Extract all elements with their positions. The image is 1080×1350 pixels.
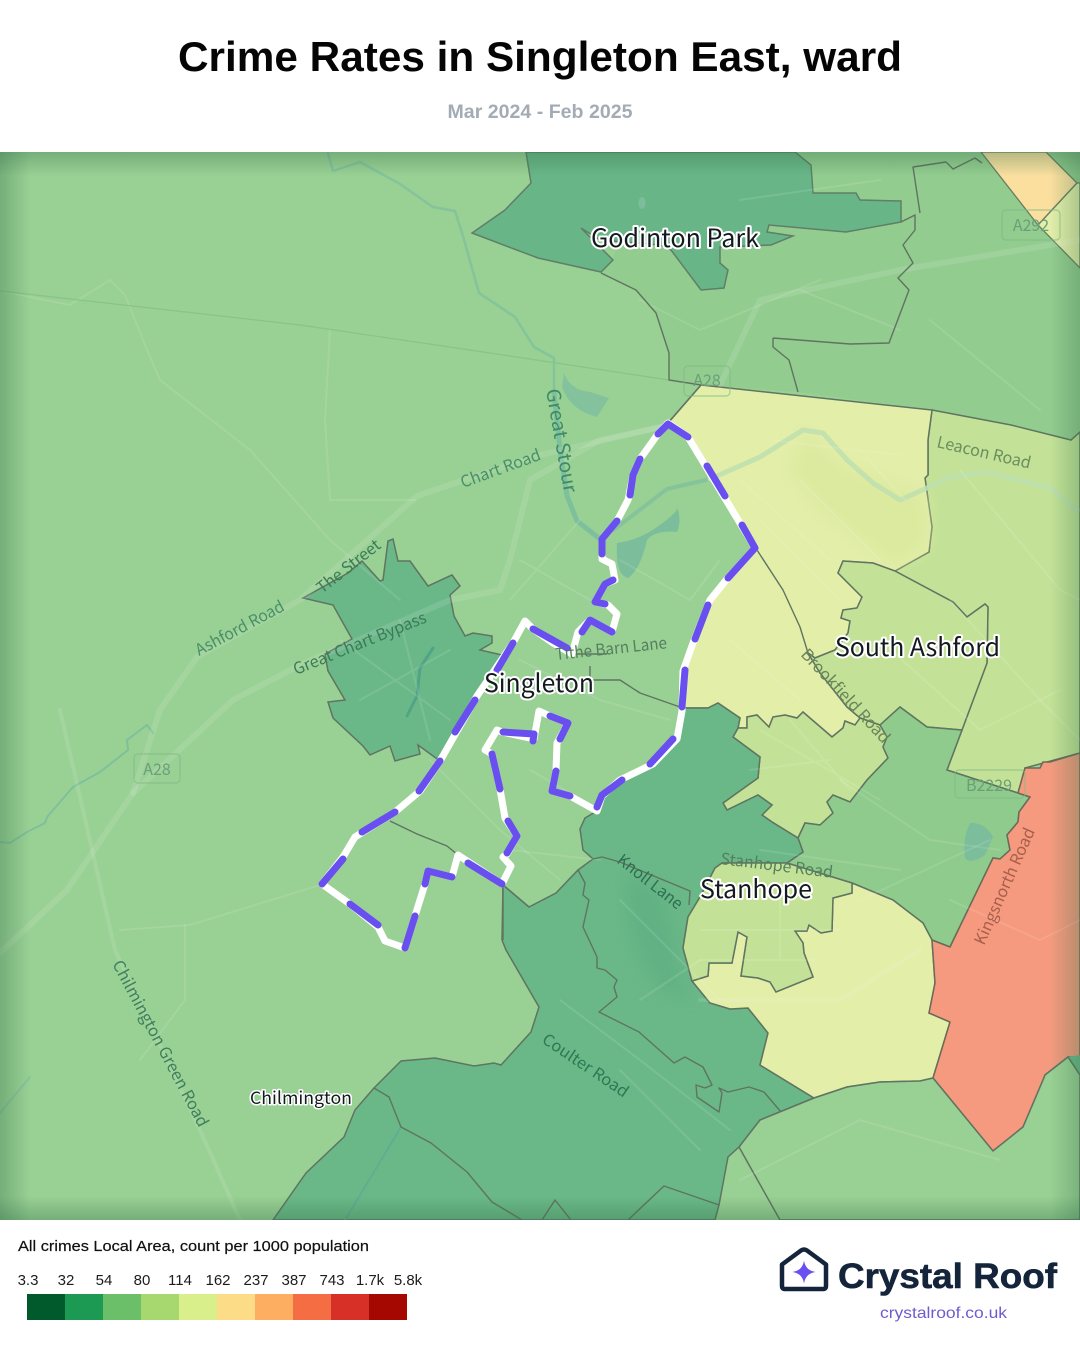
road shield labels	[143, 212, 1049, 796]
legend values: 3.3	[18, 1272, 38, 1289]
water features	[0, 153, 1077, 1220]
legend values: 80	[134, 1272, 150, 1289]
area: far north-east pale tile	[1038, 183, 1080, 268]
internal ward boundaries	[374, 158, 982, 1220]
Singleton East ward boundary	[322, 423, 755, 948]
area: central Ashford yellow	[668, 385, 932, 737]
lakes and ponds	[562, 197, 993, 861]
legend values: 743	[319, 1272, 345, 1289]
area: north-east medium green	[601, 152, 1080, 440]
legend values	[18, 1272, 423, 1289]
area: Godinton Park dark green	[472, 152, 901, 290]
legend title: All crimes Local Area, count per 1000 population	[18, 1238, 369, 1255]
area: southern dark green	[273, 703, 814, 1220]
area: eastern light green	[895, 410, 1080, 793]
area: patch south of Brookfield Road	[723, 712, 888, 838]
area: Kingsnorth red	[929, 753, 1080, 1151]
road labels: Great Stour	[540, 386, 585, 495]
place labels: Godinton Park	[591, 219, 759, 255]
legend values: 54	[96, 1272, 112, 1289]
road labels: Coulter Road	[538, 1026, 635, 1102]
road labels: Stanhope Road	[719, 845, 834, 883]
area: darker band near Knoll Lane	[641, 894, 664, 970]
legend colour bar	[27, 1294, 407, 1320]
legend values: 237	[243, 1272, 269, 1289]
area: teal corner by Kingsnorth	[1069, 1055, 1080, 1074]
legend values: 387	[281, 1272, 307, 1289]
legend values: 5.8k	[394, 1272, 423, 1289]
road shield labels: A28	[143, 756, 171, 780]
road network	[0, 180, 1080, 1220]
road labels: Chilmington Green Road	[108, 955, 216, 1131]
boundary white casing	[322, 423, 755, 948]
road labels: Kingsnorth Road	[967, 823, 1040, 948]
area: western Great Chart dark green	[303, 539, 502, 761]
website link: crystalroof.co.uk	[880, 1305, 1008, 1322]
area: south-east lower green	[739, 1057, 1080, 1220]
road labels: Brookfield Road	[796, 642, 897, 748]
title: Crime Rates in Singleton East, ward	[178, 33, 902, 80]
road shield labels: A28	[693, 367, 721, 391]
road labels: Chart Road	[457, 441, 544, 493]
road labels: The Street	[310, 532, 385, 598]
place labels: Stanhope	[700, 870, 812, 906]
legend values: 32	[58, 1272, 74, 1289]
road labels: Great Chart Bypass	[289, 604, 430, 680]
logo wordmark: Crystal Roof	[838, 1257, 1057, 1296]
map panel	[0, 152, 1080, 1220]
edge vignette	[0, 152, 1080, 1220]
road labels: Tithe Barn Lane	[554, 629, 668, 665]
railway line	[0, 291, 669, 380]
legend values: 1.7k	[356, 1272, 385, 1289]
place labels	[250, 219, 1000, 1109]
boundary purple dashes	[322, 424, 755, 948]
legend values: 162	[205, 1272, 231, 1289]
area: yellow shaded parkland	[799, 447, 933, 571]
logo: Crystal Roof	[782, 1250, 1057, 1322]
place labels: South Ashford	[835, 628, 1000, 664]
road shield labels: A292	[1013, 212, 1049, 236]
place labels: Singleton	[484, 664, 594, 700]
road labels	[108, 386, 1040, 1131]
road labels: Leacon Road	[935, 428, 1034, 473]
road shield labels: B2229	[966, 772, 1012, 796]
area: South Ashford light green	[808, 561, 988, 730]
road labels: Knoll Lane	[613, 847, 689, 914]
legend values: 114	[168, 1272, 192, 1289]
subtitle: date range: Mar 2024 - Feb 2025	[448, 102, 633, 123]
area: Stanhope light green	[683, 863, 852, 992]
legend	[18, 1238, 423, 1320]
area: Stanhope yellow	[692, 883, 950, 1098]
area: north-east orange tile	[981, 152, 1077, 225]
map base area	[0, 152, 1080, 1220]
place labels: Chilmington	[250, 1084, 352, 1109]
road labels: Ashford Road	[190, 593, 288, 660]
area: eastern medium green	[787, 707, 1030, 947]
road shields	[134, 210, 1060, 798]
icon: house with star	[782, 1250, 826, 1289]
